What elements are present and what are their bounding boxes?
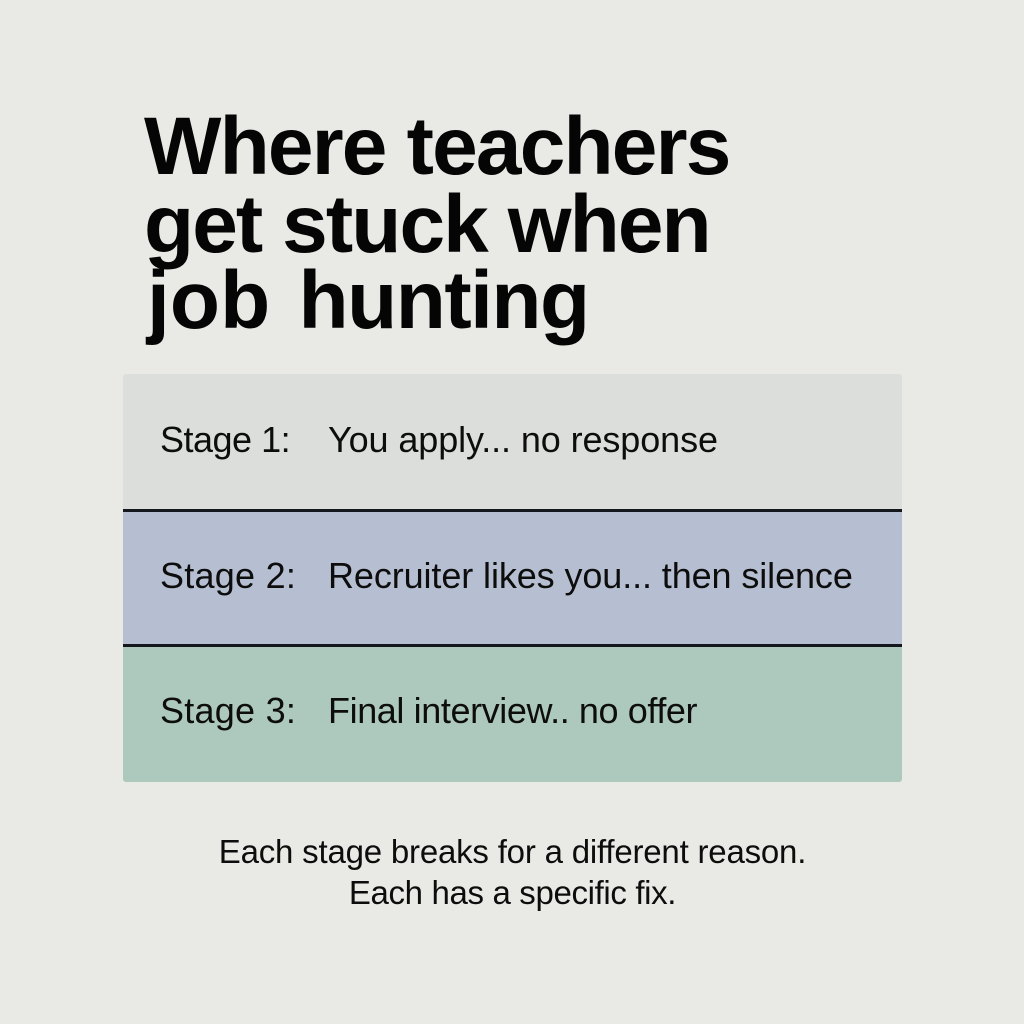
stage 2 row: Recruiter likes you... then silence	[328, 555, 853, 596]
title	[144, 101, 730, 346]
stage 2 row	[123, 511, 902, 645]
panel: stages table	[123, 374, 902, 782]
stage 1 row	[123, 374, 902, 509]
footer note	[219, 833, 806, 911]
stage 3 row: Stage 3:	[160, 690, 296, 731]
stage 3 row: Final interview.. no offer	[328, 690, 697, 731]
footer note: Each stage breaks for a different reason.	[219, 833, 806, 870]
stage 2 row: Stage 2:	[160, 555, 296, 596]
stage 1 row: Stage 1:	[160, 419, 290, 460]
title: job hunting	[147, 255, 589, 346]
stage 1 row: You apply... no response	[328, 419, 718, 460]
title: Where teachers	[144, 101, 730, 192]
title: get stuck when	[144, 179, 710, 270]
stage 3 row	[123, 647, 902, 782]
footer note: Each has a specific fix.	[349, 874, 676, 911]
